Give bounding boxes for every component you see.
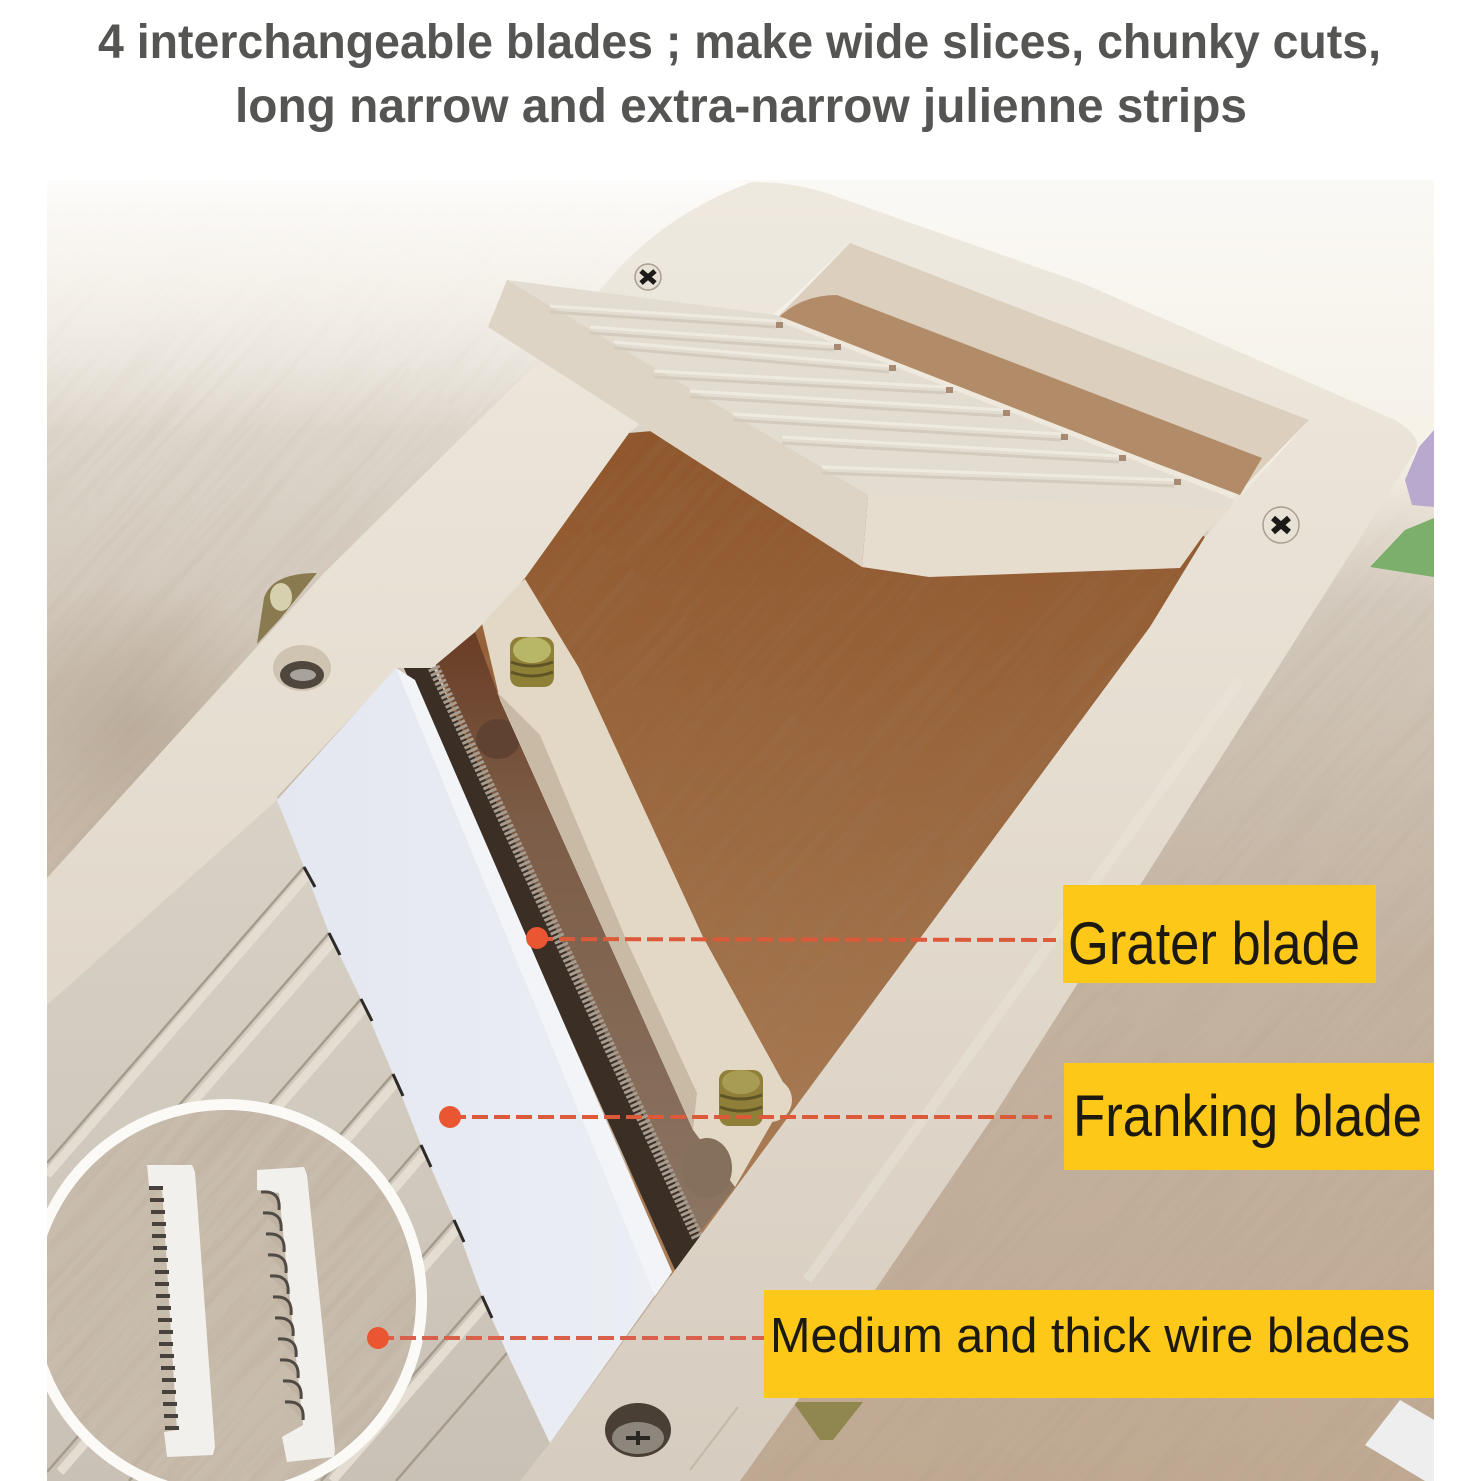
label: grater blade: Grater blade bbox=[1068, 910, 1360, 977]
raised lid with ribs bbox=[488, 280, 1235, 577]
label: franking blade: Franking blade bbox=[1073, 1084, 1422, 1149]
brown strip beside grater blade bbox=[430, 632, 735, 1245]
label: grater blade bbox=[1063, 885, 1376, 983]
label: franking blade bbox=[1064, 1063, 1434, 1170]
screw left bbox=[273, 645, 331, 691]
brass clip bottom bbox=[793, 1402, 863, 1440]
label: medium and thick wire blades bbox=[764, 1290, 1434, 1398]
screw bottom bbox=[605, 1403, 671, 1457]
white blade bbox=[277, 668, 672, 1443]
washer bottom bbox=[700, 1138, 732, 1180]
title: long narrow and extra-narrow julienne strips bbox=[235, 80, 1247, 133]
dark slot bbox=[398, 640, 702, 1270]
corrugated plate bbox=[47, 800, 550, 1481]
inset circle with wire blades bbox=[47, 1099, 427, 1481]
washer top bbox=[476, 719, 520, 759]
callout line: grater bbox=[526, 927, 1056, 949]
bolt top bbox=[510, 637, 554, 687]
brace arm bbox=[480, 579, 792, 1187]
rail highlight stripe bbox=[804, 1147, 908, 1282]
brass clip left bbox=[257, 573, 317, 644]
brown board under the slicer bbox=[430, 400, 1205, 1277]
wood visible through handle window bbox=[776, 295, 1262, 495]
bolt bottom bbox=[719, 1070, 763, 1126]
callout line: franking bbox=[439, 1106, 1052, 1128]
title bbox=[98, 16, 1381, 133]
thick wire blade bbox=[257, 1167, 335, 1462]
label: medium and thick wire blades: Medium and thick wire blades bbox=[770, 1309, 1410, 1363]
screw top bbox=[635, 264, 661, 290]
handle window inner wall bbox=[775, 243, 1309, 490]
serrated grater blade bbox=[421, 640, 698, 1238]
screw right bbox=[1263, 507, 1299, 543]
medium wire blade bbox=[147, 1165, 215, 1457]
title: 4 interchangeable blades ; make wide slices, chunky cuts, bbox=[98, 16, 1381, 69]
bottom rail slit bbox=[690, 1407, 738, 1470]
callout line: wire blades bbox=[367, 1327, 764, 1349]
